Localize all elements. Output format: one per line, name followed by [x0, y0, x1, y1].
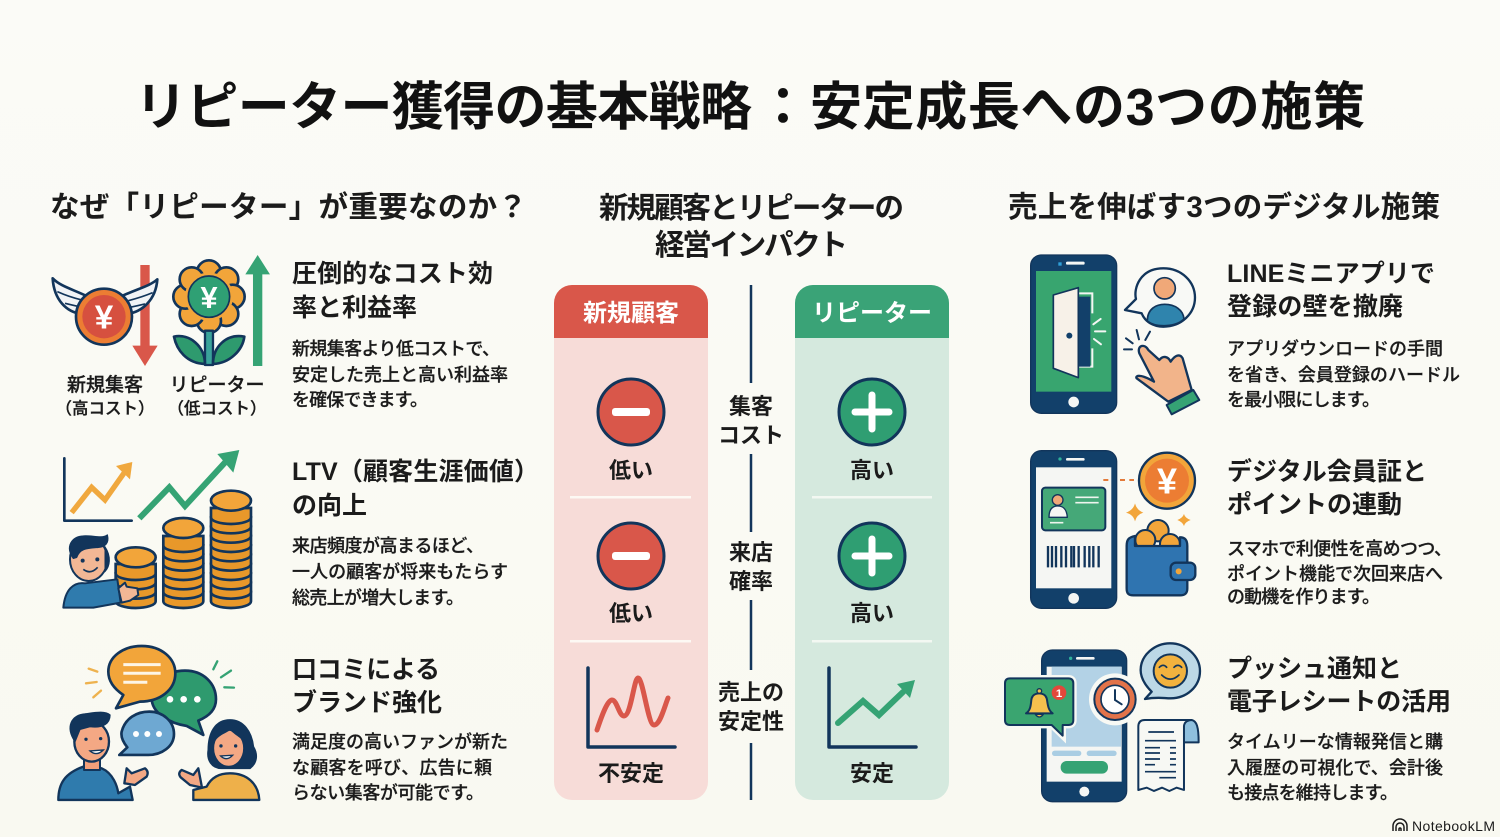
icon: cost comparison coin and flower: ¥	[95, 300, 114, 337]
text block: word of mouth: 満足度の高いファンが新た	[292, 731, 508, 752]
text block: cost efficiency	[292, 260, 508, 410]
panel: why repeaters matter	[50, 190, 539, 803]
text block: digital membership card: スマホで利便性を高めつつ、	[1227, 539, 1452, 559]
icon: phone with notification, clock, smile and receipt	[1005, 643, 1200, 802]
text block: word of mouth	[292, 656, 508, 803]
text block: word of mouth: な顧客を呼び、広告に頼	[292, 758, 492, 778]
text block: push notifications and e-receipts: 電子レシートの活用	[1227, 688, 1451, 716]
text block: cost efficiency: 率と利益率	[292, 294, 417, 322]
chart: unstable sales	[588, 668, 675, 747]
icon: cost comparison coin and flower: ¥	[200, 281, 218, 315]
text block: LTV: 来店頻度が高まるほど、	[292, 535, 484, 556]
text block: push notifications and e-receipts: タイムリーな情報発信と購	[1227, 732, 1443, 752]
text block: LTV: 総売上が増大します。	[292, 587, 464, 608]
icon: minus	[598, 523, 664, 589]
label: new customers high cost: （高コスト）	[56, 399, 154, 418]
panel: business impact comparison	[554, 192, 949, 800]
text block: word of mouth: 口コミによる	[292, 656, 440, 684]
column: new customers	[554, 285, 708, 800]
text block: push notifications and e-receipts: プッシュ通知と	[1227, 655, 1402, 683]
label: new customers high cost	[56, 374, 154, 418]
text block: LTV: の向上	[292, 492, 367, 520]
heading: why repeaters: なぜ「リピーター」が重要なのか？	[50, 190, 527, 224]
text block: digital membership card: の動機を作ります。	[1227, 587, 1380, 607]
text block: LINE mini app: を省き、会員登録のハードル	[1227, 365, 1460, 385]
icon: phone with open door and tap	[1031, 255, 1199, 414]
column: repeaters: 高い	[850, 601, 894, 626]
text block: LINE mini app: を最小限にします。	[1227, 390, 1380, 410]
text block: LINE mini app: アプリダウンロードの手間	[1227, 339, 1443, 359]
text block: word of mouth: ブランド強化	[292, 688, 442, 717]
column header: repeaters	[795, 285, 949, 338]
title: リピーター獲得の基本戦略	[135, 79, 752, 137]
icon: phone with digital card, coin and wallet	[1031, 451, 1195, 608]
column: repeaters: 安定	[850, 761, 894, 786]
icon: word of mouth conversation	[58, 646, 259, 800]
text block: LTV: 一人の顧客が将来もたらす	[292, 561, 508, 582]
heading: business impact: 新規顧客とリピーターの	[599, 192, 904, 225]
text block: digital membership card	[1227, 457, 1452, 607]
label: repeaters low cost	[168, 374, 266, 418]
title	[135, 79, 1365, 137]
heading: business impact: 経営インパクト	[655, 229, 848, 262]
text block: cost efficiency: を確保できます。	[292, 390, 428, 410]
text block: LINE mini app: 登録の壁を撤廃	[1227, 293, 1403, 321]
center axis with criteria labels: コスト	[718, 423, 784, 448]
icon: minus	[598, 379, 664, 445]
text block: push notifications and e-receipts: 入履歴の可視化で、会計後	[1227, 758, 1443, 778]
column header: new customers: 新規顧客	[583, 300, 679, 327]
title: 安定成長への3つの施策	[810, 79, 1365, 137]
text block: cost efficiency: 圧倒的なコスト効	[292, 260, 493, 288]
column header: new customers	[554, 285, 708, 338]
column: new customers: 不安定	[598, 761, 664, 786]
center axis with criteria labels	[718, 285, 784, 800]
icon: phone with digital card, coin and wallet: ¥	[1157, 460, 1177, 501]
center axis with criteria labels: 来店	[729, 540, 773, 565]
column: repeaters: 高い	[850, 458, 894, 483]
text block: cost efficiency: 新規集客より低コストで、	[292, 339, 500, 359]
center axis with criteria labels: 集客	[729, 394, 773, 419]
icon: plus	[839, 379, 905, 445]
title: ：	[757, 79, 809, 137]
heading: digital measures: 売上を伸ばす3つのデジタル施策	[1008, 190, 1440, 224]
column header: repeaters: リピーター	[812, 300, 932, 327]
text block: cost efficiency: 安定した売上と高い利益率	[292, 365, 508, 385]
text block: LTV: LTV（顧客生涯価値）	[292, 458, 539, 486]
icon: cost comparison coin and flower	[53, 255, 270, 366]
text block: push notifications and e-receipts: も接点を維持します。	[1227, 783, 1398, 803]
text block: word of mouth: らない集客が可能です。	[292, 782, 484, 803]
label: new customers high cost: 新規集客	[67, 374, 143, 396]
label: repeaters low cost: （低コスト）	[168, 399, 266, 418]
center axis with criteria labels: 売上の	[718, 680, 784, 705]
center axis with criteria labels: 安定性	[718, 709, 784, 734]
text block: digital membership card: ポイントの連動	[1227, 491, 1402, 519]
column: new customers: 低い	[609, 458, 653, 483]
text block: push notifications and e-receipts	[1227, 655, 1451, 803]
column: new customers: 低い	[609, 601, 653, 626]
icon: plus	[839, 523, 905, 589]
icon: phone with notification, clock, smile and receipt: 1	[1056, 688, 1062, 700]
chart: stable sales	[829, 668, 916, 747]
text block: digital membership card: ポイント機能で次回来店へ	[1227, 564, 1443, 584]
text block: LINE mini app	[1227, 260, 1460, 410]
column: repeaters	[795, 285, 949, 800]
text block: LTV	[292, 458, 539, 608]
text block: digital membership card: デジタル会員証と	[1227, 457, 1427, 486]
label: repeaters low cost: リピーター	[169, 374, 265, 396]
footer: NotebookLM watermark: NotebookLM	[1412, 818, 1495, 834]
heading: business impact	[599, 192, 904, 262]
icon: growth charts and coin stacks	[63, 450, 251, 608]
text block: LINE mini app: LINEミニアプリで	[1227, 260, 1435, 288]
center axis with criteria labels: 確率	[729, 569, 773, 594]
panel: digital measures	[1005, 190, 1460, 803]
